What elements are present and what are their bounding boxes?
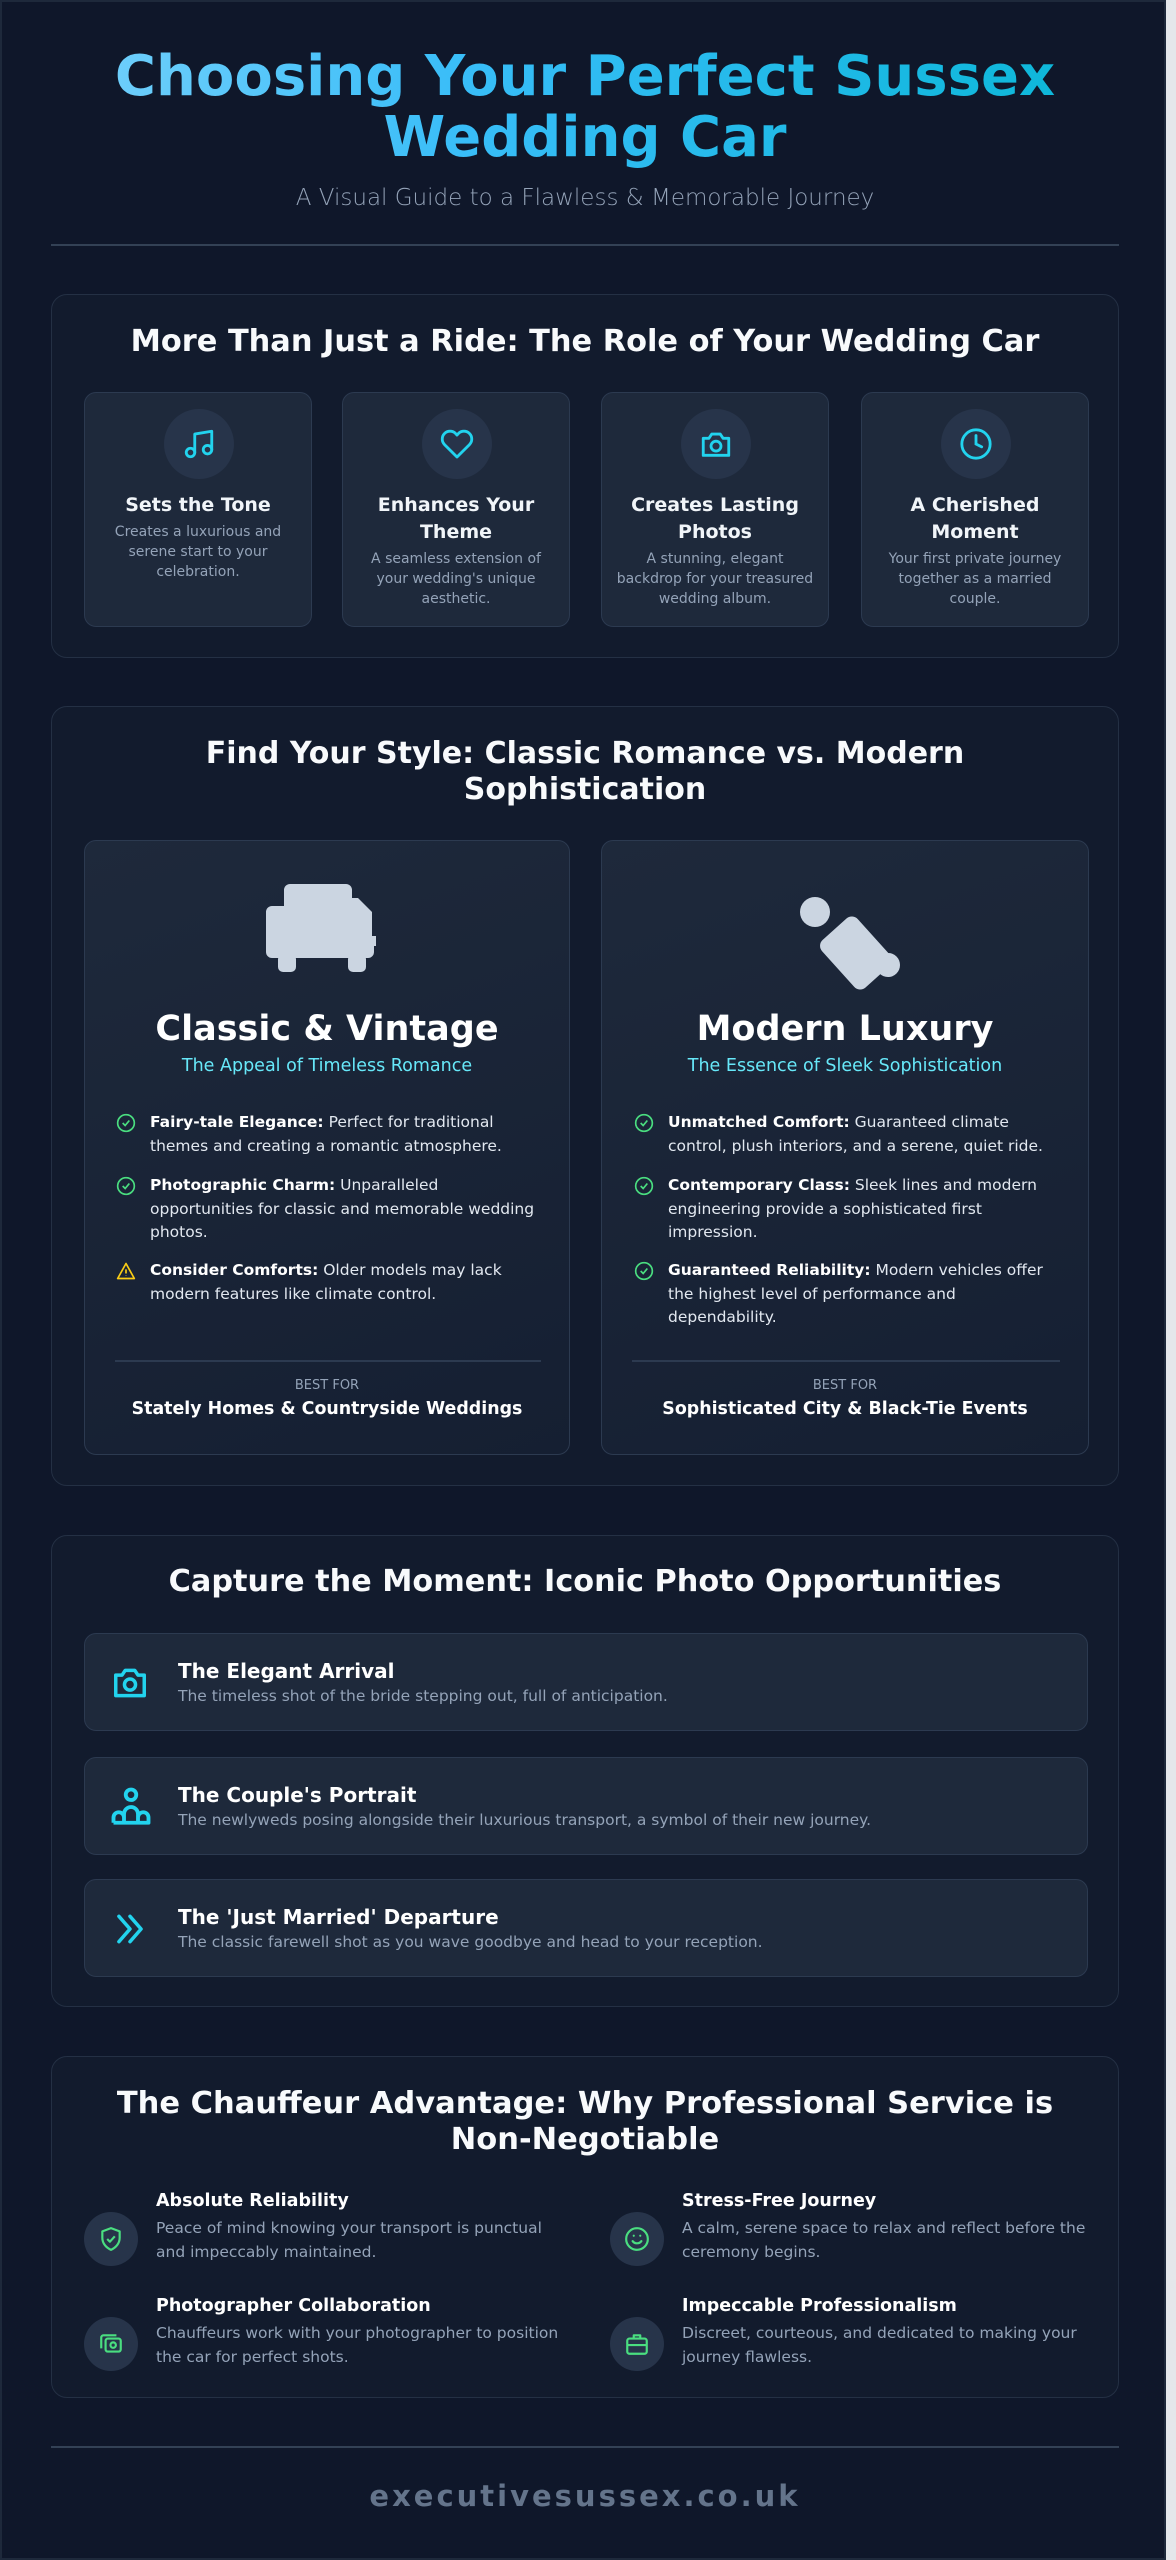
item: professionalism: Impeccable Professionalism (682, 2296, 957, 2316)
card: enhances theme: A seamless extension of your wedding's unique aesthetic. (371, 551, 541, 607)
item: professionalism (610, 2296, 1077, 2371)
icon: shield (84, 2212, 138, 2266)
item: couple's portrait: The newlyweds posing alongside their luxurious transport, a symbol of their new journey. (178, 1811, 871, 1829)
heading: photo: Capture the Moment: Iconic Photo Opportunities (169, 1564, 1001, 1599)
card: enhances theme: Theme (420, 521, 492, 543)
best for: classic: BEST FOR (295, 1378, 359, 1393)
item: reliability (84, 2191, 542, 2266)
heading: style: Find Your Style: Classic Romance vs. Modern (206, 736, 964, 771)
heading: style: Sophistication (464, 772, 706, 807)
icon: smile (610, 2212, 664, 2266)
item: photographer (84, 2296, 558, 2371)
card: lasting photos: Creates Lasting (631, 494, 799, 516)
best for: modern: BEST FOR (813, 1378, 877, 1393)
item: reliability: Absolute Reliability (156, 2191, 349, 2211)
card: modern luxury (601, 840, 1089, 1455)
card: sets the tone (84, 392, 312, 627)
best for: modern: Sophisticated City & Black-Tie Events (662, 1399, 1028, 1419)
heading: chauffeur: The Chauffeur Advantage: Why Professional Service is (117, 2086, 1053, 2121)
best for: classic: Stately Homes & Countryside Weddings (132, 1399, 522, 1419)
card: classic & vintage (84, 840, 570, 1455)
panel: chauffeur advantage (51, 2056, 1119, 2398)
best for: classic (132, 1378, 522, 1419)
bullets: classic: Fairy-tale Elegance: Perfect for traditional themes and creating a romantic atmosphere. (150, 1113, 502, 1154)
card: classic & vintage: The Appeal of Timeless Romance (182, 1056, 472, 1076)
card: enhances theme: Enhances Your (378, 494, 534, 516)
item: professionalism: Discreet, courteous, and dedicated to making your journey flawless. (682, 2324, 1077, 2366)
item: departure: The 'Just Married' Departure (178, 1905, 499, 1929)
subtitle: A Visual Guide to a Flawless & Memorable Journey (296, 185, 874, 211)
icon: modern car (800, 897, 900, 990)
bullets: modern: Guaranteed Reliability: Modern vehicles offer the highest level of performance and dependability. (668, 1261, 1043, 1326)
item: stress-free (610, 2191, 1085, 2266)
item: departure (84, 1879, 1088, 1977)
title: Wedding Car (383, 105, 787, 170)
item: photographer: Photographer Collaboration (156, 2296, 431, 2316)
item: couple's portrait: The Couple's Portrait (178, 1783, 416, 1807)
card: sets the tone: Creates a luxurious and serene start to your celebration. (115, 524, 281, 580)
item: photographer: Chauffeurs work with your photographer to position the car for perfect shots. (156, 2324, 558, 2366)
bullets: classic: Photographic Charm: Unparalleled opportunities for classic and memorable wedding photos. (150, 1176, 534, 1241)
item: reliability: Peace of mind knowing your transport is punctual and impeccably maintained. (156, 2219, 542, 2261)
icon: briefcase (610, 2317, 664, 2371)
best for: modern (662, 1378, 1028, 1419)
heading: chauffeur: Non-Negotiable (451, 2122, 719, 2157)
item: couple's portrait (84, 1757, 1088, 1855)
title (2, 46, 1168, 168)
bullets: classic (116, 1113, 534, 1302)
card: sets the tone: Sets the Tone (125, 494, 271, 516)
card: lasting photos: A stunning, elegant backdrop for your treasured wedding album. (617, 551, 813, 607)
card: lasting photos (601, 392, 829, 627)
item: elegant arrival (84, 1633, 1088, 1731)
card: cherished moment: Moment (931, 521, 1019, 543)
card: enhances theme (342, 392, 570, 627)
item: elegant arrival: The timeless shot of the bride stepping out, full of anticipation. (178, 1687, 668, 1705)
footer: website: executivesussex.co.uk (369, 2479, 801, 2513)
bullets: modern (634, 1113, 1043, 1326)
bullets: classic: Consider Comforts: Older models may lack modern features like climate control. (150, 1261, 502, 1302)
panel: find your style (51, 706, 1119, 1486)
panel: role of wedding car (51, 294, 1119, 658)
icon: photos (84, 2317, 138, 2371)
title: Choosing Your Perfect Sussex (115, 44, 1055, 109)
panel: photo opportunities (51, 1535, 1119, 2007)
icon: camera (114, 1668, 146, 1698)
bullets: modern: Unmatched Comfort: Guaranteed climate control, plush interiors, and a serene, quiet ride. (668, 1113, 1043, 1154)
item: stress-free: A calm, serene space to relax and reflect before the ceremony begins. (682, 2219, 1085, 2261)
heading: modern: Modern Luxury (697, 1009, 993, 1049)
icon: music (164, 409, 234, 479)
icon: double chevron (117, 1914, 143, 1944)
card: modern luxury: The Essence of Sleek Sophistication (688, 1056, 1002, 1076)
icon: clock (941, 409, 1011, 479)
item: departure: The classic farewell shot as you wave goodbye and head to your reception. (178, 1933, 763, 1951)
heading: chauffeur (117, 2086, 1053, 2157)
card: cherished moment: A Cherished (911, 494, 1039, 516)
heading: classic: Classic & Vintage (155, 1009, 499, 1049)
heading: style (206, 736, 964, 807)
icon: heart (422, 409, 492, 479)
card: cherished moment: Your first private journey together as a married couple. (889, 551, 1061, 607)
item: stress-free: Stress-Free Journey (682, 2191, 876, 2211)
icon: camera (681, 409, 751, 479)
card: cherished moment (861, 392, 1089, 627)
icon: vintage car (266, 884, 376, 972)
heading: role: More Than Just a Ride: The Role of Your Wedding Car (131, 324, 1039, 359)
bullets: modern: Contemporary Class: Sleek lines and modern engineering provide a sophisticated first impression. (668, 1176, 1037, 1241)
icon: people (112, 1788, 150, 1825)
card: lasting photos: Photos (678, 521, 752, 543)
item: elegant arrival: The Elegant Arrival (178, 1659, 395, 1683)
